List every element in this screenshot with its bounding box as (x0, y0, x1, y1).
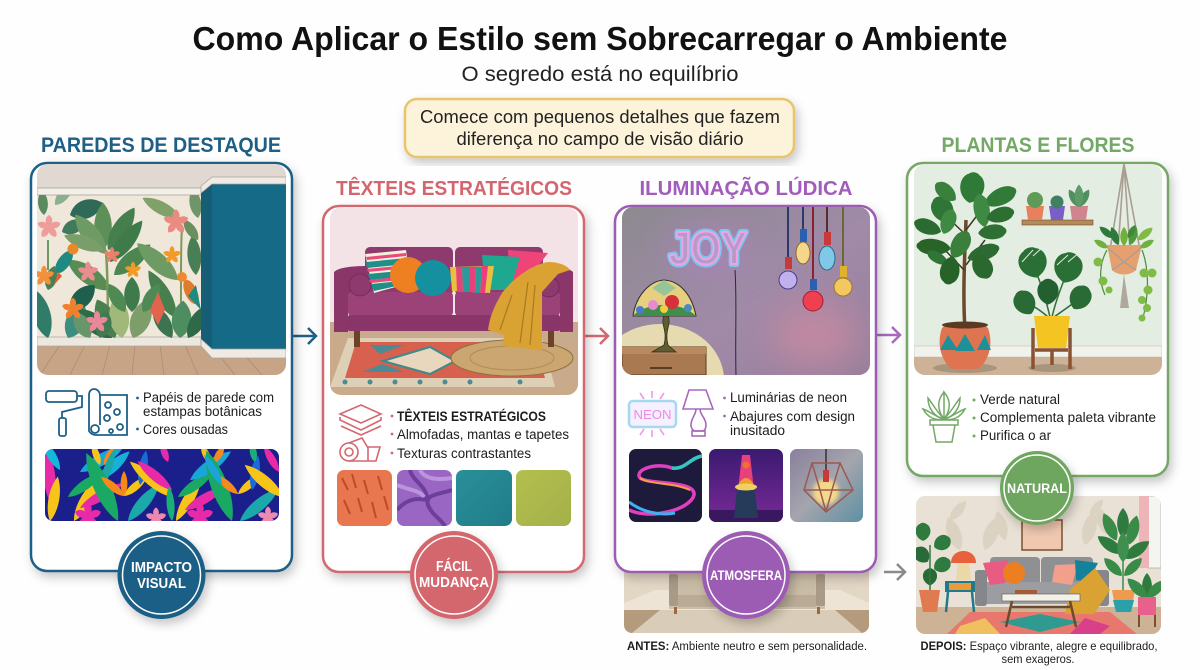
illustration: botanical accent wall (27, 164, 286, 375)
panel: têxteis estratégicos (323, 176, 584, 619)
arrow: iluminação to plantas (876, 327, 900, 343)
card: iluminação (615, 206, 876, 572)
icon: potted plant (923, 392, 965, 442)
swatch: lime linen (516, 470, 571, 526)
yellow pot and stand (1034, 316, 1070, 348)
patterned pot (940, 322, 990, 369)
nightstand (622, 347, 706, 375)
panel: paredes de destaque (27, 134, 292, 619)
arrow: têxteis to iluminação (584, 328, 608, 344)
caption: depois: sem exageros. (1002, 652, 1074, 666)
swatch: purple silk (397, 470, 452, 526)
icon: rolled rug (340, 438, 380, 461)
illustration: antes room (624, 570, 869, 633)
pattern: colourful tropical strip (45, 449, 279, 521)
throw blanket (488, 262, 570, 350)
sofa (990, 557, 1040, 582)
subtitle: O segredo está no equilíbrio (462, 63, 738, 86)
shelf (1022, 220, 1093, 225)
neon JOY (667, 228, 749, 268)
icon: paint roller (46, 391, 82, 436)
badge: fácil mudança: MUDANÇA (419, 575, 489, 591)
throw (1065, 568, 1110, 614)
icon: stacked pillows (340, 405, 381, 435)
thumb: lava lamp (709, 449, 783, 522)
illustration: purple sofa with pillows and rugs (330, 207, 578, 395)
text: têxteis bullets: Texturas contrastantes (397, 446, 531, 461)
neon JOY: JOY (669, 222, 747, 274)
fiddle leaf fig (964, 220, 966, 330)
icon: neon sign (629, 391, 676, 437)
text: iluminação bullets: Luminárias de neon (730, 390, 847, 405)
panel: plantas e flores (907, 134, 1168, 525)
card: têxteis (323, 206, 584, 572)
right plant (1122, 561, 1124, 590)
sofa (354, 330, 360, 347)
caption: depois: DEPOIS: Espaço vibrante, alegre e equilibrado, (920, 639, 1158, 653)
badge: natural: NATURAL (1007, 481, 1067, 496)
badge: impacto visual: IMPACTO (131, 560, 192, 576)
macrame hanger (1110, 164, 1140, 250)
icon: neon sign: NEON (634, 407, 672, 422)
illustration: depois room (910, 496, 1168, 634)
badge: natural (1000, 451, 1074, 525)
text: iluminação bullets: Abajures com design (730, 409, 855, 424)
swatch: coral shag (337, 470, 392, 526)
text: plantas bullets: Purifica o ar (980, 428, 1051, 443)
tiffany lamp (652, 315, 676, 352)
rugs (330, 338, 555, 387)
teal feature wall (201, 177, 286, 358)
small plant (1142, 573, 1152, 598)
thumb: geometric pendant (790, 449, 863, 522)
illustration: plants room (912, 164, 1162, 375)
heading: paredes: PAREDES DE DESTAQUE (41, 134, 281, 157)
callout: Comece com pequenos detalhes que fazem (420, 107, 780, 127)
thumb: LED strip (629, 449, 702, 522)
text: têxteis bullets (391, 409, 569, 461)
framed picture (1022, 520, 1062, 550)
panel: iluminação lúdica (596, 176, 876, 619)
card: paredes (31, 163, 292, 571)
curtain and window (1148, 496, 1161, 568)
swatch: teal velvet (456, 470, 512, 526)
side table and lamp (945, 581, 975, 592)
callout: diferença no campo de visão diário (456, 129, 744, 149)
text: plantas bullets (972, 392, 1156, 443)
illustration: neon wall and lamps (622, 207, 870, 375)
callout (405, 99, 794, 157)
text: paredes bullets (136, 390, 274, 437)
text: paredes bullets: Cores ousadas (143, 422, 228, 437)
caption: antes: ANTES: Ambiente neutro e sem personalidade. (627, 641, 867, 653)
bulbs (788, 207, 843, 280)
rug (947, 612, 1137, 634)
left plant (916, 523, 930, 541)
text: paredes bullets: Papéis de parede com (143, 390, 274, 405)
text: iluminação bullets: inusitado (730, 423, 785, 438)
caption: depois (920, 639, 1158, 666)
text: têxteis bullets: TÊXTEIS ESTRATÉGICOS (397, 409, 546, 424)
text: têxteis bullets: Almofadas, mantas e tapetes (397, 427, 569, 442)
pillows (365, 250, 410, 293)
badge: atmosfera (702, 531, 790, 619)
badge: fácil mudança (410, 531, 498, 619)
heading: plantas: PLANTAS E FLORES (942, 134, 1134, 157)
arrow: paredes to têxteis (292, 328, 316, 344)
neon JOY: JOY (669, 222, 747, 274)
heading: têxteis: TÊXTEIS ESTRATÉGICOS (336, 176, 572, 200)
icon: wallpaper roll (89, 389, 127, 435)
badge: fácil mudança: FÁCIL (436, 558, 472, 575)
heading: iluminação: ILUMINAÇÃO LÚDICA (640, 176, 852, 200)
badge: impacto visual: VISUAL (137, 576, 186, 592)
title: Como Aplicar o Estilo sem Sobrecarregar o Ambiente (192, 20, 1008, 57)
text: plantas bullets: Complementa paleta vibrante (980, 410, 1156, 425)
card: plantas (907, 163, 1168, 476)
botanical print (37, 195, 201, 338)
icon: table lamp (683, 390, 713, 436)
parrots (52, 244, 202, 310)
badge: atmosfera: ATMOSFERA (710, 567, 782, 583)
text: paredes bullets: estampas botânicas (143, 404, 262, 419)
coffee table (1002, 594, 1080, 601)
text: plantas bullets: Verde natural (980, 392, 1060, 407)
badge: impacto visual (118, 531, 206, 619)
text: iluminação bullets (723, 390, 855, 438)
pillows (983, 560, 1008, 585)
monstera (1026, 265, 1080, 317)
arrow: antes to depois (884, 564, 905, 580)
